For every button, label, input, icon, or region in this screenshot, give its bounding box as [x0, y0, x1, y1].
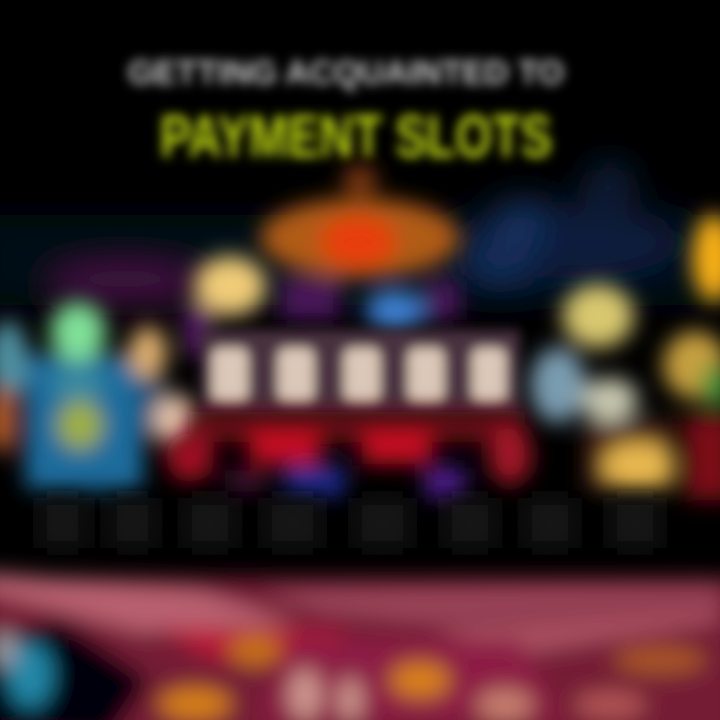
- central reels panel: [200, 330, 520, 415]
- left machine with lamp: [0, 256, 266, 490]
- title: [128, 54, 564, 170]
- right machines with lamps: [530, 214, 720, 500]
- title: GETTING ACQUAINTED TO: [128, 54, 564, 92]
- carpet floor: [0, 572, 720, 720]
- slot reels: [212, 348, 506, 402]
- crown sign on top of central machine: [260, 166, 460, 330]
- dark machine bases: [40, 498, 660, 548]
- heading: payment slots: PAYMENT SLOTS: [160, 103, 552, 170]
- background: dark navy sky: [0, 167, 720, 305]
- machine cabinet red band: [166, 412, 532, 498]
